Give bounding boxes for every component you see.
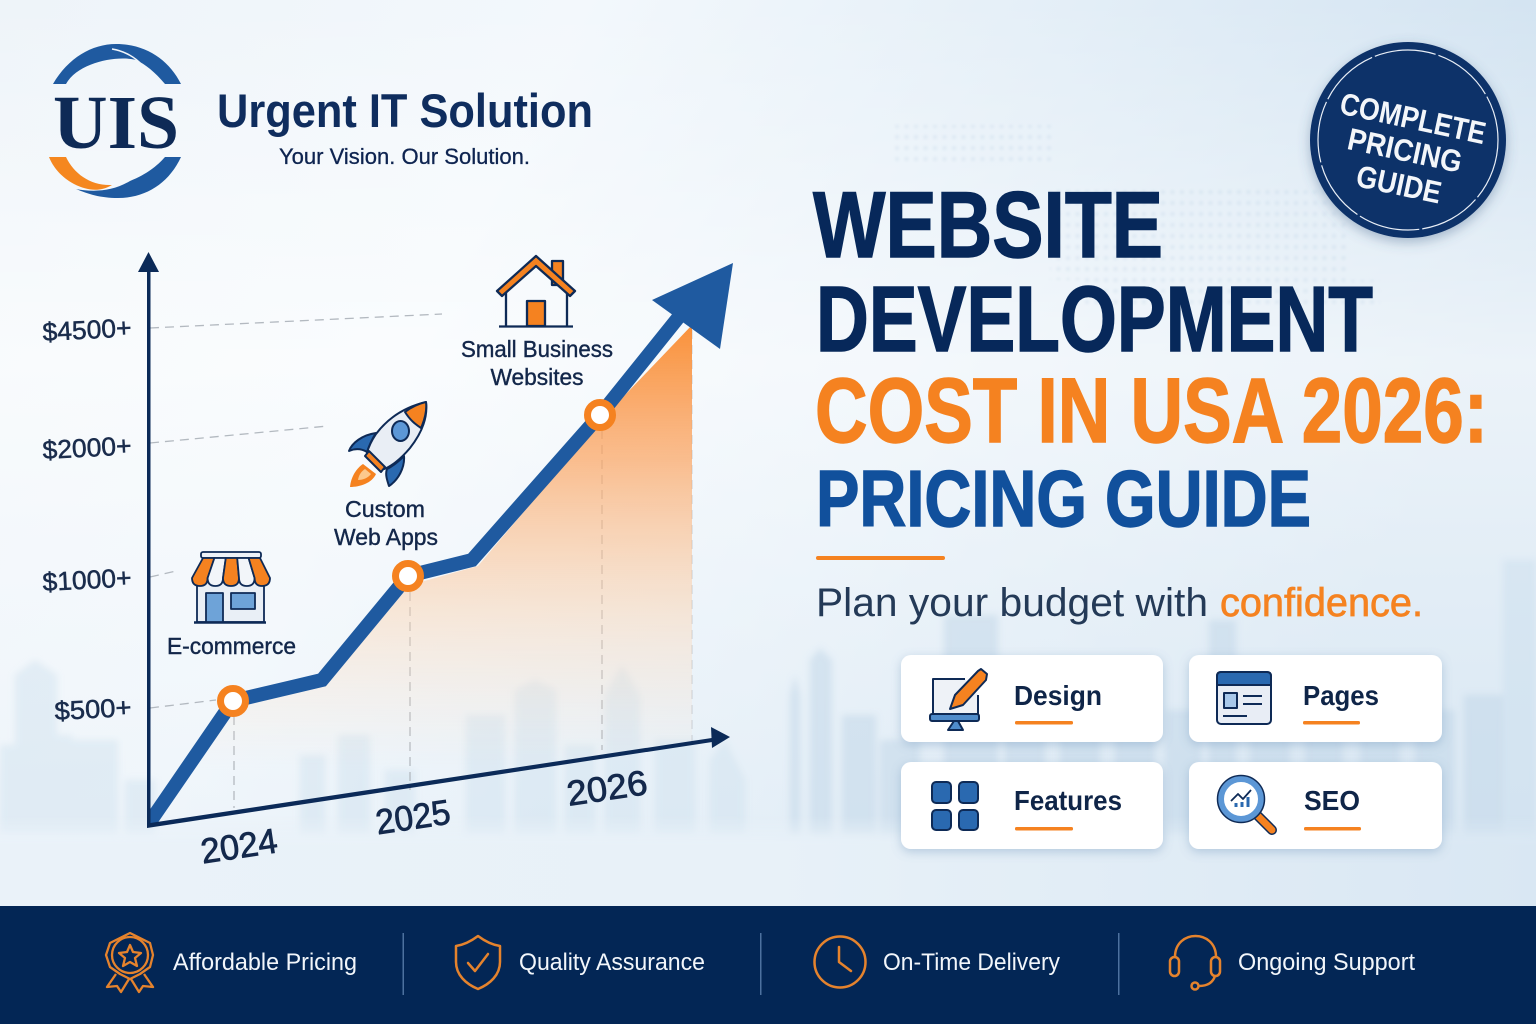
- label: Features: [1014, 785, 1122, 816]
- title: DEVELOPMENT: [816, 267, 1373, 371]
- icon: award ribbon: [106, 933, 153, 992]
- markers: [220, 402, 612, 714]
- x axis labels: 2024: [198, 822, 280, 871]
- tagline: Your Vision. Our Solution.: [279, 144, 530, 169]
- ground haze: [792, 826, 1186, 837]
- badge text: GUIDE: [1353, 158, 1445, 211]
- icon: shield check: [456, 936, 500, 989]
- growth line and arrow: [143, 263, 733, 832]
- y axis labels: $500+: [54, 692, 132, 726]
- y axis labels: $1000+: [42, 562, 132, 597]
- dot texture: [895, 125, 1380, 310]
- x axis labels: 2026: [564, 763, 650, 814]
- badge text: PRICING: [1345, 121, 1465, 180]
- logo ring: bottom arcs: [49, 157, 181, 198]
- icon: monitor and pencil: [930, 669, 987, 730]
- x axis labels: [198, 763, 650, 871]
- footer dividers: [402, 933, 1120, 995]
- x axis: [147, 727, 730, 828]
- label: small business websites: [461, 336, 613, 390]
- label: custom web apps: [334, 496, 438, 550]
- chart: [42, 252, 733, 871]
- brand name: Urgent IT Solution: [217, 84, 593, 137]
- label: on-time delivery: On-Time Delivery: [883, 949, 1060, 976]
- icon: headset: [1170, 936, 1220, 990]
- skyline backdrop: [0, 560, 1536, 835]
- label: small business websites: Websites: [490, 364, 584, 390]
- logo: [49, 44, 181, 198]
- icon: browser window: [1217, 672, 1271, 724]
- badge text: COMPLETE: [1337, 86, 1489, 151]
- label: quality assurance: Quality Assurance: [519, 949, 705, 976]
- label: e-commerce: E-commerce: [167, 633, 296, 659]
- title divider: [816, 556, 945, 560]
- icon: four squares: [932, 782, 978, 830]
- y axis: [138, 252, 159, 826]
- y axis labels: [42, 312, 132, 726]
- y axis labels: $4500+: [42, 312, 132, 347]
- label: custom web apps: Web Apps: [334, 524, 438, 550]
- underline: [1015, 827, 1073, 830]
- badge: complete pricing guide: [1310, 42, 1506, 238]
- subtitle: [816, 581, 1423, 625]
- card: seo: [1189, 762, 1442, 849]
- x axis labels: 2025: [373, 793, 453, 842]
- label: small business websites: Small Business: [461, 336, 613, 362]
- icon: storefront: [192, 552, 270, 622]
- logo ring: top arc: [53, 44, 181, 84]
- underline: [1015, 721, 1073, 724]
- title: [813, 172, 1488, 543]
- label: affordable pricing: Affordable Pricing: [173, 949, 357, 976]
- badge text: [1337, 86, 1489, 211]
- orange area: [152, 325, 692, 825]
- icon: clock: [814, 936, 866, 988]
- logo letters: UIS: [53, 81, 179, 165]
- icon: magnifier with chart: [1218, 776, 1272, 830]
- y axis labels: $2000+: [42, 430, 132, 465]
- label: ongoing support: Ongoing Support: [1238, 949, 1415, 976]
- underline: [1304, 827, 1361, 830]
- icon: house: [497, 256, 575, 326]
- label: custom web apps: Custom: [345, 496, 425, 522]
- title: WEBSITE: [813, 172, 1163, 277]
- card: pages: [1189, 655, 1442, 742]
- card: design: [901, 655, 1163, 742]
- footer bar: [0, 906, 1536, 1024]
- guide lines: [150, 314, 692, 808]
- title: PRICING GUIDE: [816, 454, 1311, 543]
- label: Pages: [1303, 680, 1379, 711]
- underline: [1303, 721, 1360, 724]
- subtitle: Plan your budget with: [816, 581, 1208, 625]
- label: Design: [1014, 680, 1102, 711]
- card: features: [901, 762, 1163, 849]
- label: SEO: [1304, 785, 1360, 816]
- subtitle: confidence.: [1220, 581, 1423, 625]
- icon: rocket: [349, 402, 426, 487]
